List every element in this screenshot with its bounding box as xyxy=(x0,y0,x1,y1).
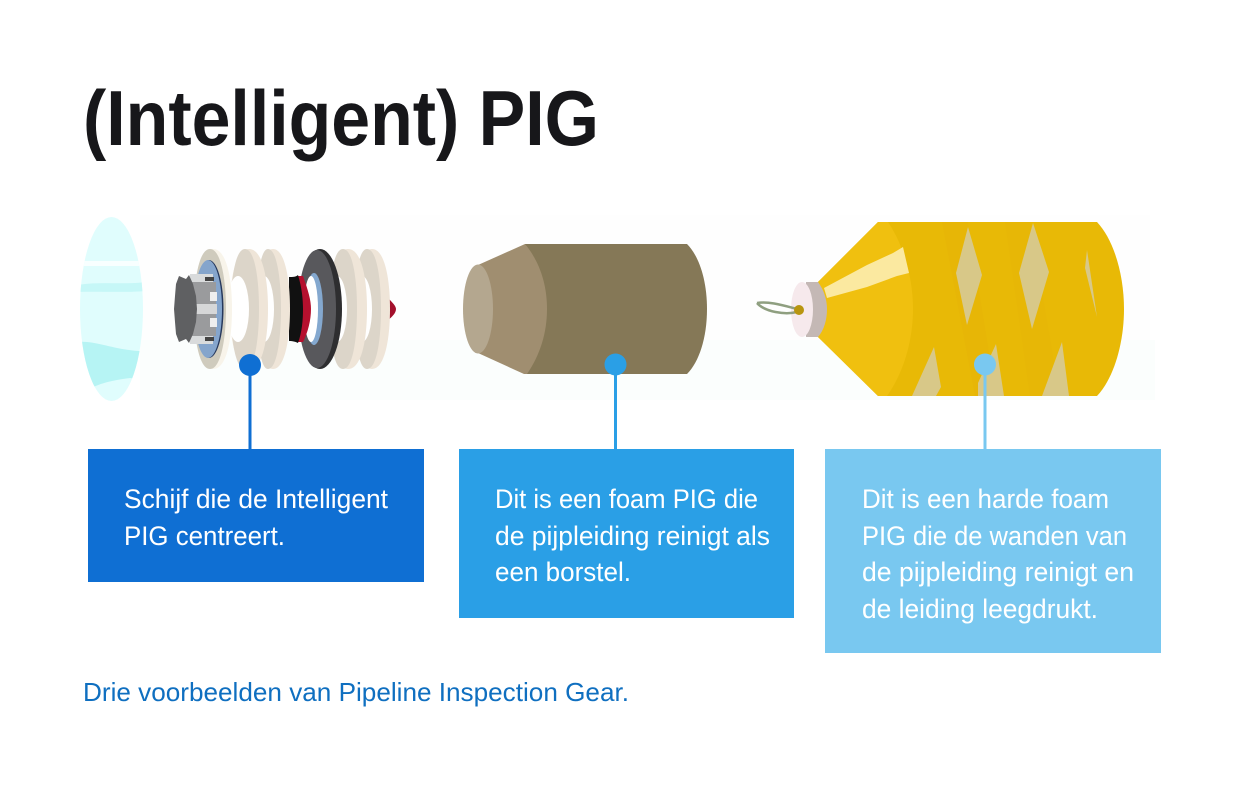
black and red core xyxy=(289,275,311,343)
PIG 3: hard foam PIG xyxy=(757,222,1124,396)
knot xyxy=(794,305,804,315)
cone xyxy=(818,222,913,396)
foam gaps xyxy=(956,227,982,325)
connector 3 xyxy=(974,354,996,450)
brush disc xyxy=(298,249,342,369)
connector 2 xyxy=(604,354,626,450)
end cap xyxy=(806,282,827,337)
caption: Drie voorbeelden van Pipeline Inspection Gear. xyxy=(83,677,629,707)
panel: hard foam PIG xyxy=(825,449,1161,653)
panel: foam PIG: de pijpleiding reinigt als xyxy=(495,521,770,551)
connector 1 xyxy=(239,354,261,450)
panel: hard foam PIG: de pijpleiding reinigt en xyxy=(862,557,1134,587)
panel: hard foam PIG: PIG die de wanden van xyxy=(862,521,1127,551)
panel: foam PIG xyxy=(459,449,794,618)
disc 2 xyxy=(227,249,268,369)
PIG 1: intelligent PIG centring discs xyxy=(174,249,396,369)
disc 4 xyxy=(327,249,367,369)
disc 3 xyxy=(254,249,290,369)
disc 5 xyxy=(352,249,390,369)
panel: intelligent PIG disc: PIG centreert. xyxy=(124,521,285,551)
PIG 2: foam PIG xyxy=(463,244,707,374)
panel: hard foam PIG: de leiding leegdrukt. xyxy=(862,594,1098,624)
title: (Intelligent) PIG xyxy=(83,74,599,162)
panel: intelligent PIG disc: Schijf die de Intelligent xyxy=(124,484,388,514)
panel: foam PIG: een borstel. xyxy=(495,557,631,587)
rear nub xyxy=(388,298,396,320)
hub with bolts xyxy=(174,274,217,344)
front disc xyxy=(194,249,232,369)
panel: hard foam PIG: Dit is een harde foam xyxy=(862,484,1109,514)
rope xyxy=(757,303,797,313)
panel: intelligent PIG disc xyxy=(88,449,424,582)
panel: foam PIG: Dit is een foam PIG die xyxy=(495,484,758,514)
highlight xyxy=(824,247,909,298)
icon: lens disc xyxy=(80,217,143,401)
